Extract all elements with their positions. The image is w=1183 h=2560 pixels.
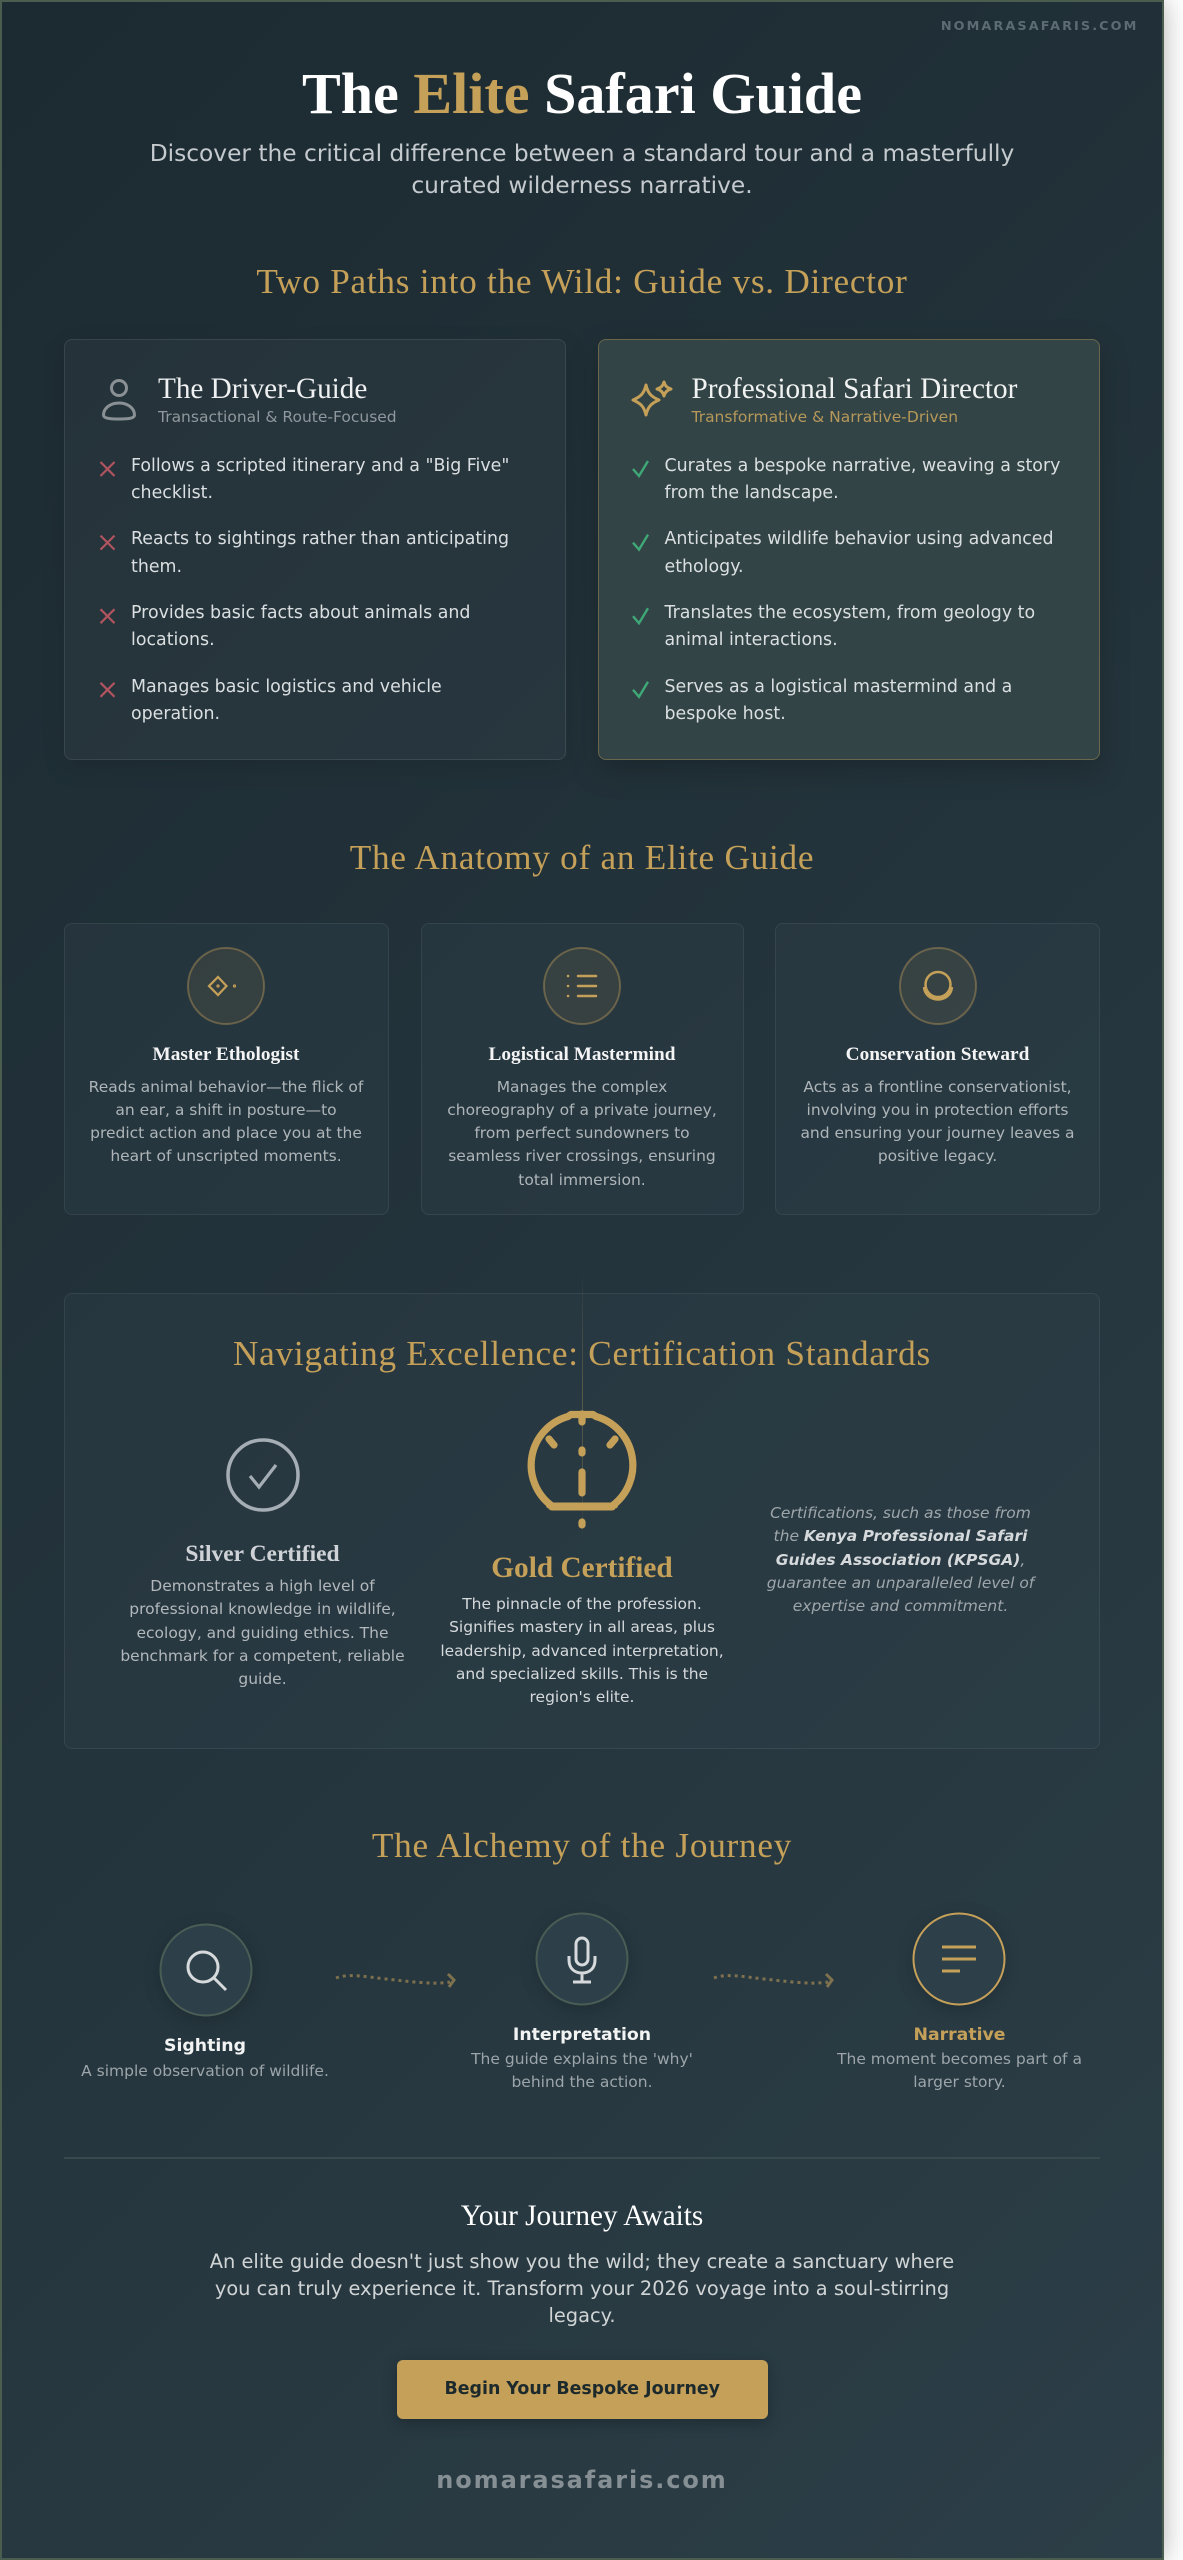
icon: narrative node [912, 1912, 1006, 2006]
narrative text [836, 2050, 1082, 2091]
director list [664, 456, 1060, 503]
silver text: Demonstrates a high level of [150, 1577, 375, 1595]
cta text: legacy. [548, 2304, 616, 2327]
narrative text: The moment becomes part of a [837, 2050, 1082, 2068]
silver text: guide. [238, 1670, 287, 1688]
interpretation text: The guide explains the 'why' [471, 2050, 693, 2068]
driver-guide list: locations. [131, 630, 215, 650]
icon: ring [899, 947, 977, 1025]
driver-guide list [131, 677, 442, 724]
logistical mastermind text: choreography of a private journey, [447, 1101, 717, 1119]
sighting text: A simple observation of wildlife. [81, 2062, 329, 2080]
director list: Serves as a logistical mastermind and a [664, 677, 1012, 697]
icon: list [543, 947, 621, 1025]
title: The Elite Safari Guide [302, 61, 862, 126]
gold text: Signifies mastery in all areas, plus [449, 1618, 715, 1636]
panel: safari director [598, 339, 1100, 760]
icon: eye diamond [187, 947, 265, 1025]
cta button [397, 2360, 768, 2419]
subtitle: Discover the critical difference between a standard tour and a masterfully [150, 140, 1014, 167]
driver-guide list: Follows a scripted itinerary and a "Big Five" [131, 456, 509, 476]
director list: animal interactions. [664, 630, 838, 650]
logistical mastermind text: seamless river crossings, ensuring [448, 1147, 716, 1165]
driver-guide list: checklist. [131, 483, 213, 503]
panel: driver-guide [64, 339, 566, 760]
narrative text: larger story. [913, 2073, 1006, 2091]
gold text: region's elite. [530, 1688, 634, 1706]
heading: anatomy: The Anatomy of an Elite Guide [350, 838, 814, 876]
conservation steward text: Acts as a frontline conservationist, [803, 1078, 1072, 1096]
icon: gold medal [528, 1410, 636, 1529]
silver text: professional knowledge in wildlife, [129, 1600, 396, 1618]
certification note: the Kenya Professional Safari [774, 1527, 1027, 1545]
master ethologist text: heart of unscripted moments. [110, 1147, 342, 1165]
director list: from the landscape. [664, 483, 839, 503]
driver-guide list [131, 603, 470, 650]
cta text: you can truly experience it. Transform your 2026 voyage into a soul-stirring [215, 2277, 949, 2300]
master ethologist text [89, 1078, 364, 1165]
cta text: An elite guide doesn't just show you the wild; they create a sanctuary where [210, 2250, 954, 2273]
cta heading: Your Journey Awaits [461, 2200, 703, 2232]
gold title: Gold Certified [491, 1552, 673, 1584]
logistical mastermind text: from perfect sundowners to [474, 1124, 690, 1142]
certification note: Certifications, such as those from [770, 1504, 1031, 1522]
subtitle: curated wilderness narrative. [411, 172, 753, 199]
conservation steward text [800, 1078, 1075, 1165]
icons: checks [632, 460, 649, 699]
director list: Translates the ecosystem, from geology to [664, 603, 1035, 623]
icon: person [102, 379, 136, 420]
driver-guide list [131, 456, 509, 503]
director list [664, 529, 1054, 577]
heading: alchemy: The Alchemy of the Journey [372, 1826, 792, 1865]
logistical mastermind text [447, 1078, 717, 1189]
silver title: Silver Certified [185, 1540, 340, 1566]
driver-guide subtitle: Transactional & Route-Focused [158, 408, 397, 426]
director list: Anticipates wildlife behavior using advanced [664, 529, 1054, 549]
logistical mastermind text: total immersion. [518, 1171, 646, 1189]
panel: conservation steward [775, 923, 1100, 1215]
certification note: expertise and commitment. [793, 1597, 1008, 1615]
director list [664, 677, 1012, 724]
certification note [767, 1504, 1036, 1615]
narrative label: Narrative [913, 2024, 1006, 2044]
interpretation text: behind the action. [511, 2073, 653, 2091]
arrow 2 [714, 1973, 834, 1988]
director list: Curates a bespoke narrative, weaving a story [664, 456, 1060, 476]
gold text: leadership, advanced interpretation, [440, 1642, 724, 1660]
gold text: and specialized skills. This is the [456, 1665, 708, 1683]
interpretation text [471, 2050, 693, 2091]
panel: master ethologist [64, 923, 388, 1215]
panel: certification [64, 1293, 1100, 1749]
panel: logistical mastermind [420, 923, 744, 1215]
driver-guide list: Provides basic facts about animals and [131, 603, 470, 623]
heading: certification: Navigating Excellence: Certification Standards [233, 1334, 931, 1372]
silver text: ecology, and guiding ethics. The [136, 1624, 388, 1642]
watermark top: NOMARASAFARIS.COM [941, 19, 1138, 34]
certification note: Guides Association (KPSGA), [776, 1551, 1025, 1569]
master ethologist title: Master Ethologist [153, 1044, 299, 1064]
icon: interpretation node [536, 1912, 628, 2006]
driver-guide list: them. [131, 557, 182, 577]
director subtitle: Transformative & Narrative-Driven [692, 408, 958, 426]
driver-guide list: Reacts to sightings rather than anticipating [131, 529, 509, 549]
sighting label: Sighting [164, 2036, 246, 2056]
cta button: Begin Your Bespoke Journey [444, 2379, 720, 2399]
master ethologist text: Reads animal behavior—the flick of [89, 1078, 363, 1096]
cta text [210, 2250, 954, 2327]
conservation steward text: involving you in protection efforts [807, 1101, 1068, 1119]
gold text: The pinnacle of the profession. [462, 1595, 702, 1613]
master ethologist text: predict action and place you at the [90, 1124, 362, 1142]
vertical connector [582, 1270, 583, 1540]
interpretation label: Interpretation [513, 2024, 651, 2044]
footer url: nomarasafaris.com [436, 2466, 728, 2494]
driver-guide list [131, 529, 509, 577]
driver-guide title: The Driver-Guide [158, 373, 367, 405]
director list [664, 603, 1035, 650]
icon: sighting node [160, 1924, 252, 2016]
certification note: guarantee an unparalleled level of [767, 1574, 1034, 1592]
icon: sparkles [632, 380, 672, 416]
master ethologist text: an ear, a shift in posture—to [115, 1101, 337, 1119]
driver-guide list: operation. [131, 704, 220, 724]
logistical mastermind title: Logistical Mastermind [489, 1044, 675, 1064]
subtitle [150, 140, 1014, 199]
conservation steward text: positive legacy. [878, 1147, 997, 1165]
conservation steward text: and ensuring your journey leaves a [800, 1124, 1075, 1142]
gold text [440, 1595, 724, 1706]
icons: crosses [100, 461, 116, 698]
director list: ethology. [664, 557, 744, 577]
icon: silver check [226, 1438, 300, 1512]
driver-guide list: Manages basic logistics and vehicle [131, 677, 442, 697]
director list: bespoke host. [664, 704, 786, 724]
silver text [120, 1577, 405, 1688]
silver text: benchmark for a competent, reliable [120, 1647, 405, 1665]
arrow 1 [336, 1973, 456, 1988]
heading: two paths: Two Paths into the Wild: Guide vs. Director [256, 262, 908, 301]
conservation steward title: Conservation Steward [846, 1044, 1029, 1064]
director title: Professional Safari Director [692, 373, 1017, 405]
logistical mastermind text: Manages the complex [497, 1078, 667, 1096]
